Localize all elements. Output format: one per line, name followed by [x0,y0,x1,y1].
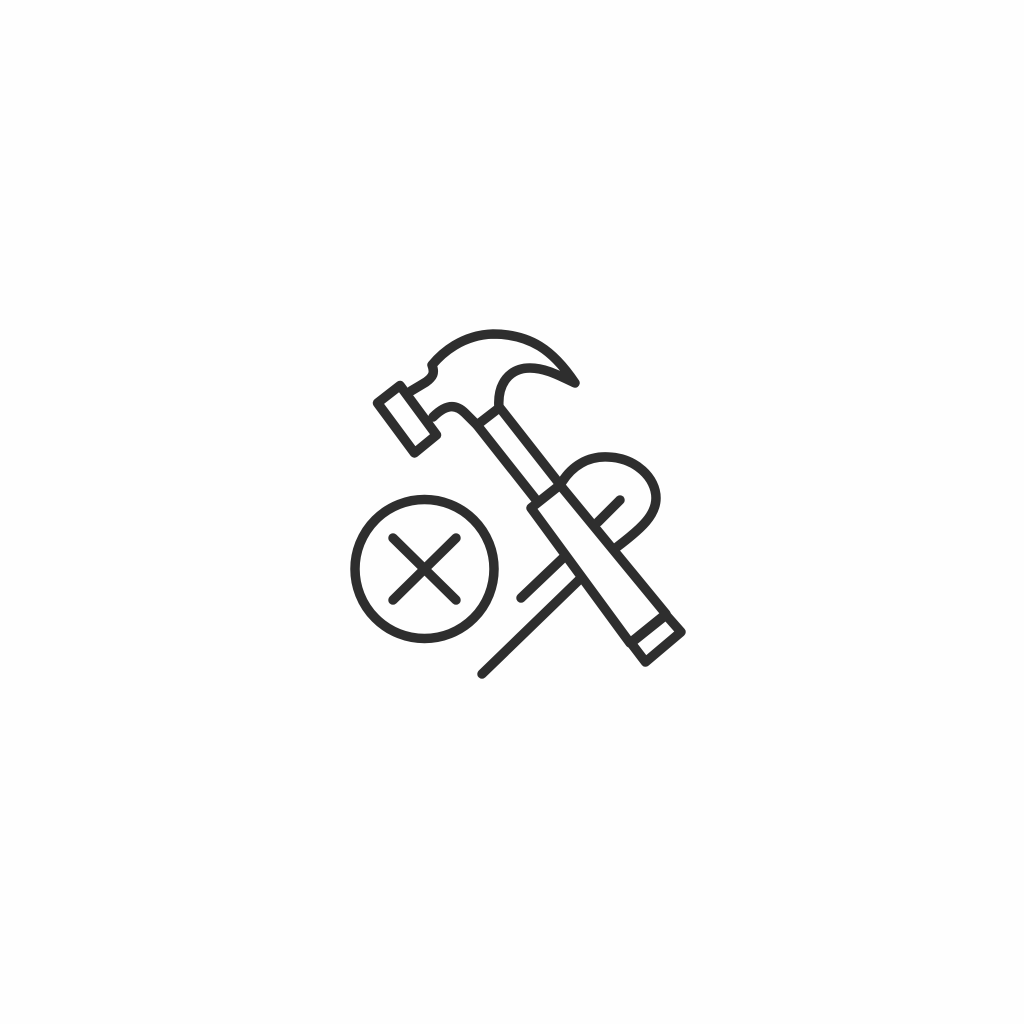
rounded shape outline [562,457,656,547]
icon: nail and shape behind hammer [482,457,656,674]
long diagonal line [482,580,579,674]
hammer face [378,386,436,453]
hammer head and claw [411,334,575,425]
circle [355,500,494,638]
icon: hammer [378,334,681,662]
hammer end cap [631,615,681,662]
cross [393,538,456,600]
icon: circle with cross [355,500,494,638]
hammer handle [477,408,558,501]
hammer grip [531,485,666,643]
short diagonal line [521,558,563,598]
inner stroke [598,500,620,522]
